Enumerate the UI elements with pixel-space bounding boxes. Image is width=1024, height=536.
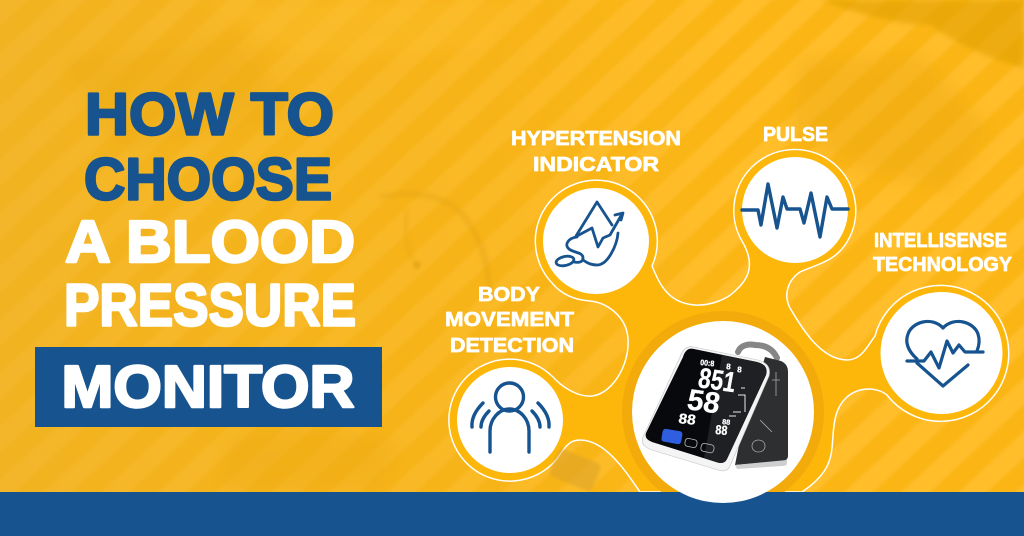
blood pressure monitor device: [642, 345, 788, 471]
device shell: [642, 347, 770, 471]
feature labels: [445, 124, 1013, 357]
label: indicator: INDICATOR: [533, 154, 660, 176]
display digits: 00:8: [700, 358, 715, 368]
circle: pulse: [742, 157, 848, 263]
label: movement: MOVEMENT: [445, 309, 574, 331]
label: detection: DETECTION: [450, 335, 574, 357]
ring behind monitor: [622, 311, 824, 513]
display digits: 851: [696, 362, 738, 399]
label: body: BODY: [478, 284, 541, 306]
cuff print: [752, 372, 780, 452]
title line: how to: HOW TO: [85, 82, 334, 148]
connected blob network: [449, 149, 1009, 492]
smudge: faded device in photo: [548, 447, 602, 493]
icon: pulse waveform: [742, 184, 848, 237]
title line: pressure: PRESSURE: [64, 272, 356, 338]
device buttons: [661, 428, 715, 453]
footer band: [0, 492, 1024, 536]
display digits: 88: [715, 422, 728, 438]
label: technology: TECHNOLOGY: [873, 254, 1013, 276]
display digits: [678, 358, 743, 438]
title: [64, 82, 356, 338]
cuff bottom rim: [735, 460, 787, 469]
icon: person with motion waves: [472, 383, 549, 452]
display digits: 58: [685, 383, 723, 420]
icon: hypertension: [555, 202, 623, 267]
title line: choose: CHOOSE: [84, 146, 332, 212]
circle: monitor product: [632, 321, 814, 503]
label: pulse: PULSE: [763, 124, 828, 146]
circle: body movement detection: [457, 367, 563, 473]
label: intellisense: INTELLISENSE: [874, 230, 1007, 252]
monitor banner: MONITOR: [62, 354, 354, 420]
label: hypertension: HYPERTENSION: [511, 128, 681, 150]
circle: hypertension indicator: [543, 188, 649, 294]
title line: a blood: A BLOOD: [65, 209, 355, 275]
level ticks: [729, 388, 745, 416]
display digits: 8: [726, 362, 732, 371]
display digits: 88: [722, 419, 731, 427]
circle: intellisense technology: [880, 292, 1002, 414]
device screen: [646, 349, 767, 463]
cuff: [735, 357, 788, 465]
monitor banner: [35, 347, 382, 427]
display digits: 88: [678, 410, 697, 428]
cuff tube: [738, 345, 777, 358]
display digits: 8: [737, 365, 743, 374]
icon: heart with pulse: [907, 321, 983, 386]
